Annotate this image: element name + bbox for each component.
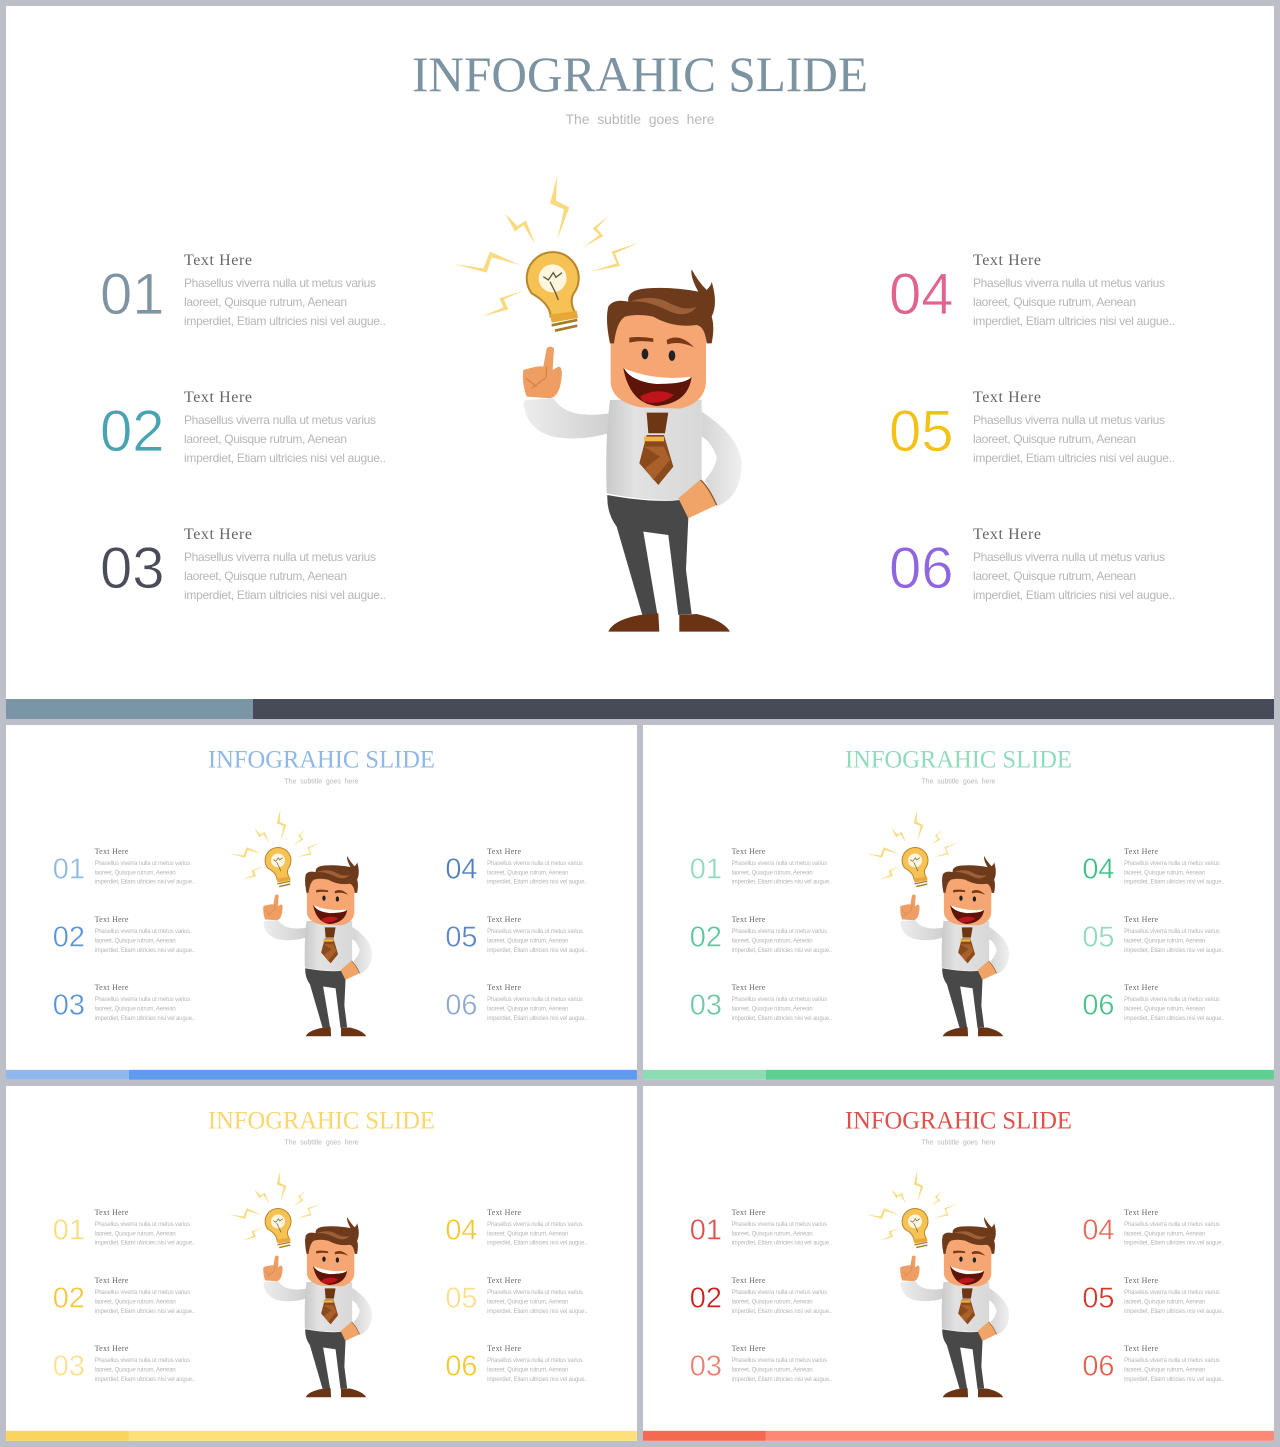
item 02: laoreet, Quisque rutrum, Aenean	[184, 432, 347, 446]
subtitle: The subtitle goes here	[566, 111, 715, 127]
item 03	[690, 1344, 832, 1383]
item 05: Text Here	[487, 1276, 521, 1285]
item 05: 05	[445, 1282, 477, 1314]
item 05	[445, 915, 588, 954]
item 05: imperdiet, Etiam ultricies nisi vel augue..	[1124, 948, 1225, 954]
item 02	[53, 1276, 195, 1315]
item 01: Text Here	[732, 1208, 766, 1217]
item 05: Phasellus viverra nulla ut metus varius	[487, 929, 583, 935]
item 06: Phasellus viverra nulla ut metus varius	[487, 997, 583, 1003]
item 03: imperdiet, Etiam ultricies nisi vel augue..	[732, 1377, 832, 1383]
item 01	[690, 1208, 832, 1247]
item 02: Phasellus viverra nulla ut metus varius	[95, 929, 190, 935]
item 06: Phasellus viverra nulla ut metus varius	[1124, 1358, 1220, 1364]
item 04: 04	[889, 262, 954, 327]
bottom colour bar	[643, 1070, 1274, 1080]
illustration: businessman with light bulb	[229, 1171, 372, 1397]
item 01: Phasellus viverra nulla ut metus varius	[732, 861, 827, 867]
title: INFOGRAHIC SLIDE	[845, 746, 1072, 773]
title: INFOGRAHIC SLIDE	[208, 1107, 435, 1134]
item 04: 04	[1082, 1214, 1114, 1246]
item 01: laoreet, Quisque rutrum, Aenean	[732, 1231, 813, 1237]
item 02: imperdiet, Etiam ultricies nisi vel augue..	[732, 1309, 832, 1315]
item 02	[100, 389, 386, 465]
item 06: 06	[445, 990, 477, 1022]
item 06	[445, 983, 588, 1022]
subtitle: The subtitle goes here	[284, 1140, 359, 1147]
slide: yellow	[6, 1086, 637, 1441]
item 01: Phasellus viverra nulla ut metus varius	[95, 1222, 190, 1228]
item 06: laoreet, Quisque rutrum, Aenean	[973, 569, 1136, 583]
item 03: Phasellus viverra nulla ut metus varius	[732, 997, 827, 1003]
item 05: imperdiet, Etiam ultricies nisi vel augue..	[973, 451, 1175, 465]
subtitle: The subtitle goes here	[921, 779, 996, 786]
item 06: Text Here	[973, 526, 1041, 543]
item 02: 02	[53, 1282, 85, 1314]
item 01	[690, 847, 832, 886]
item 05: Phasellus viverra nulla ut metus varius	[973, 413, 1165, 427]
item 05: imperdiet, Etiam ultricies nisi vel augue..	[487, 1309, 588, 1315]
item 06: imperdiet, Etiam ultricies nisi vel augue..	[973, 588, 1175, 602]
slide: blue	[6, 725, 637, 1080]
item 05: 05	[1082, 1282, 1114, 1314]
item 02: Phasellus viverra nulla ut metus varius	[732, 929, 827, 935]
item 06: Phasellus viverra nulla ut metus varius	[1124, 997, 1220, 1003]
item 03: 03	[690, 990, 722, 1022]
item 02: Phasellus viverra nulla ut metus varius	[732, 1290, 827, 1296]
item 03: 03	[100, 536, 165, 601]
bottom colour bar	[6, 699, 1274, 719]
slide: red	[643, 1086, 1274, 1441]
item 03	[53, 983, 195, 1022]
item 03: Text Here	[184, 526, 252, 543]
item 05: laoreet, Quisque rutrum, Aenean	[973, 432, 1136, 446]
item 03: laoreet, Quisque rutrum, Aenean	[732, 1007, 813, 1013]
item 06: Text Here	[1124, 1344, 1158, 1353]
item 05: Text Here	[1124, 915, 1158, 924]
item 05: 05	[1082, 921, 1114, 953]
item 04: Text Here	[1124, 847, 1158, 856]
item 03: Phasellus viverra nulla ut metus varius	[95, 997, 190, 1003]
subtitle: The subtitle goes here	[284, 779, 359, 786]
item 04: Phasellus viverra nulla ut metus varius	[1124, 1222, 1220, 1228]
item 01: Text Here	[95, 847, 129, 856]
item 01: imperdiet, Etiam ultricies nisi vel augue..	[732, 880, 832, 886]
item 06: laoreet, Quisque rutrum, Aenean	[1124, 1368, 1205, 1374]
item 05	[1082, 1276, 1225, 1315]
item 04: imperdiet, Etiam ultricies nisi vel augue..	[487, 880, 588, 886]
item 03: 03	[690, 1351, 722, 1383]
item 06: laoreet, Quisque rutrum, Aenean	[487, 1007, 568, 1013]
item 04: imperdiet, Etiam ultricies nisi vel augue..	[487, 1241, 588, 1247]
item 02	[53, 915, 195, 954]
item 04: imperdiet, Etiam ultricies nisi vel augue..	[1124, 880, 1225, 886]
item 02: imperdiet, Etiam ultricies nisi vel augue..	[732, 948, 832, 954]
item 01: Text Here	[95, 1208, 129, 1217]
item 05: 05	[889, 399, 954, 464]
item 06: imperdiet, Etiam ultricies nisi vel augue..	[1124, 1016, 1225, 1022]
item 01: imperdiet, Etiam ultricies nisi vel augue..	[95, 1241, 195, 1247]
item 06: Text Here	[1124, 983, 1158, 992]
item 06: imperdiet, Etiam ultricies nisi vel augue..	[487, 1016, 588, 1022]
item 03: imperdiet, Etiam ultricies nisi vel augue..	[184, 588, 386, 602]
item 06	[445, 1344, 588, 1383]
item 02: laoreet, Quisque rutrum, Aenean	[732, 1299, 813, 1305]
item 03: laoreet, Quisque rutrum, Aenean	[95, 1368, 176, 1374]
bottom colour bar	[6, 1431, 637, 1441]
item 01: 01	[100, 262, 165, 327]
item 02: Text Here	[95, 915, 129, 924]
item 06	[889, 526, 1175, 602]
item 03: laoreet, Quisque rutrum, Aenean	[184, 569, 347, 583]
item 04: Phasellus viverra nulla ut metus varius	[973, 276, 1165, 290]
item 02: 02	[690, 1282, 722, 1314]
item 03: Text Here	[732, 1344, 766, 1353]
item 06: Text Here	[487, 983, 521, 992]
item 01: Phasellus viverra nulla ut metus varius	[184, 276, 376, 290]
item 01: 01	[53, 853, 85, 885]
item 03: 03	[53, 990, 85, 1022]
item 02: Phasellus viverra nulla ut metus varius	[95, 1290, 190, 1296]
item 05: Phasellus viverra nulla ut metus varius	[487, 1290, 583, 1296]
item 03: laoreet, Quisque rutrum, Aenean	[95, 1007, 176, 1013]
illustration: businessman with light bulb	[454, 176, 742, 632]
item 02: 02	[100, 399, 165, 464]
item 03: 03	[53, 1351, 85, 1383]
item 05: Text Here	[487, 915, 521, 924]
item 01: imperdiet, Etiam ultricies nisi vel augue..	[95, 880, 195, 886]
item 06	[1082, 1344, 1225, 1383]
item 06: imperdiet, Etiam ultricies nisi vel augue..	[1124, 1377, 1225, 1383]
item 06: imperdiet, Etiam ultricies nisi vel augue..	[487, 1377, 588, 1383]
item 03	[53, 1344, 195, 1383]
item 01: 01	[53, 1214, 85, 1246]
item 01: Phasellus viverra nulla ut metus varius	[732, 1222, 827, 1228]
item 02: laoreet, Quisque rutrum, Aenean	[732, 938, 813, 944]
item 01: Phasellus viverra nulla ut metus varius	[95, 861, 190, 867]
bottom colour bar	[6, 1070, 637, 1080]
item 04: 04	[1082, 853, 1114, 885]
item 05	[445, 1276, 588, 1315]
item 02: imperdiet, Etiam ultricies nisi vel augue..	[184, 451, 386, 465]
title: INFOGRAHIC SLIDE	[412, 46, 868, 102]
item 02: laoreet, Quisque rutrum, Aenean	[95, 938, 176, 944]
item 01: 01	[690, 1214, 722, 1246]
item 03: imperdiet, Etiam ultricies nisi vel augue..	[732, 1016, 832, 1022]
item 02	[690, 915, 832, 954]
illustration: businessman with light bulb	[866, 810, 1009, 1036]
item 05: laoreet, Quisque rutrum, Aenean	[487, 938, 568, 944]
item 03: imperdiet, Etiam ultricies nisi vel augue..	[95, 1377, 195, 1383]
item 02: imperdiet, Etiam ultricies nisi vel augue..	[95, 948, 195, 954]
item 06: 06	[1082, 1351, 1114, 1383]
item 02: Text Here	[95, 1276, 129, 1285]
item 03: Phasellus viverra nulla ut metus varius	[184, 550, 376, 564]
item 05: Text Here	[973, 389, 1041, 406]
slide: main grey	[6, 6, 1274, 719]
item 04: Phasellus viverra nulla ut metus varius	[1124, 861, 1220, 867]
item 03: Text Here	[95, 1344, 129, 1353]
item 02: Text Here	[732, 915, 766, 924]
item 02: Text Here	[732, 1276, 766, 1285]
item 01: Text Here	[184, 252, 252, 269]
item 04: Phasellus viverra nulla ut metus varius	[487, 861, 583, 867]
item 02: laoreet, Quisque rutrum, Aenean	[95, 1299, 176, 1305]
item 04: laoreet, Quisque rutrum, Aenean	[1124, 870, 1205, 876]
item 03: laoreet, Quisque rutrum, Aenean	[732, 1368, 813, 1374]
item 01: laoreet, Quisque rutrum, Aenean	[95, 1231, 176, 1237]
item 03: Phasellus viverra nulla ut metus varius	[95, 1358, 190, 1364]
item 06: 06	[1082, 990, 1114, 1022]
item 04: Text Here	[1124, 1208, 1158, 1217]
item 06: laoreet, Quisque rutrum, Aenean	[1124, 1007, 1205, 1013]
item 05: imperdiet, Etiam ultricies nisi vel augue..	[487, 948, 588, 954]
item 05: laoreet, Quisque rutrum, Aenean	[487, 1299, 568, 1305]
title: INFOGRAHIC SLIDE	[845, 1107, 1072, 1134]
item 04: Text Here	[487, 847, 521, 856]
item 01	[53, 1208, 195, 1247]
item 05: laoreet, Quisque rutrum, Aenean	[1124, 938, 1205, 944]
item 06: 06	[445, 1351, 477, 1383]
item 04: Phasellus viverra nulla ut metus varius	[487, 1222, 583, 1228]
item 05	[889, 389, 1175, 465]
item 06: laoreet, Quisque rutrum, Aenean	[487, 1368, 568, 1374]
subtitle: The subtitle goes here	[921, 1140, 996, 1147]
item 06: Phasellus viverra nulla ut metus varius	[487, 1358, 583, 1364]
item 02: Text Here	[184, 389, 252, 406]
title: INFOGRAHIC SLIDE	[208, 746, 435, 773]
item 01	[100, 252, 386, 328]
item 01	[53, 847, 195, 886]
item 06: 06	[889, 536, 954, 601]
item 05: laoreet, Quisque rutrum, Aenean	[1124, 1299, 1205, 1305]
illustration: businessman with light bulb	[229, 810, 372, 1036]
item 04: laoreet, Quisque rutrum, Aenean	[973, 295, 1136, 309]
item 03: Text Here	[732, 983, 766, 992]
item 04	[445, 1208, 588, 1247]
item 04: imperdiet, Etiam ultricies nisi vel augue..	[973, 314, 1175, 328]
item 04: 04	[445, 853, 477, 885]
item 01: laoreet, Quisque rutrum, Aenean	[184, 295, 347, 309]
item 04: laoreet, Quisque rutrum, Aenean	[487, 870, 568, 876]
item 01: 01	[690, 853, 722, 885]
item 03: Phasellus viverra nulla ut metus varius	[732, 1358, 827, 1364]
item 04: 04	[445, 1214, 477, 1246]
item 05: imperdiet, Etiam ultricies nisi vel augue..	[1124, 1309, 1225, 1315]
item 02: imperdiet, Etiam ultricies nisi vel augue..	[95, 1309, 195, 1315]
slide: green	[643, 725, 1274, 1080]
item 05: 05	[445, 921, 477, 953]
item 04: laoreet, Quisque rutrum, Aenean	[487, 1231, 568, 1237]
item 04: Text Here	[487, 1208, 521, 1217]
item 05: Text Here	[1124, 1276, 1158, 1285]
item 05	[1082, 915, 1225, 954]
item 03	[100, 526, 386, 602]
item 03: imperdiet, Etiam ultricies nisi vel augue..	[95, 1016, 195, 1022]
item 05: Phasellus viverra nulla ut metus varius	[1124, 1290, 1220, 1296]
item 06: Phasellus viverra nulla ut metus varius	[973, 550, 1165, 564]
item 06: Text Here	[487, 1344, 521, 1353]
item 04: laoreet, Quisque rutrum, Aenean	[1124, 1231, 1205, 1237]
item 02: 02	[690, 921, 722, 953]
item 04	[1082, 1208, 1225, 1247]
item 01: Text Here	[732, 847, 766, 856]
item 01: laoreet, Quisque rutrum, Aenean	[95, 870, 176, 876]
item 04	[445, 847, 588, 886]
item 01: imperdiet, Etiam ultricies nisi vel augue..	[732, 1241, 832, 1247]
item 03: Text Here	[95, 983, 129, 992]
item 01: laoreet, Quisque rutrum, Aenean	[732, 870, 813, 876]
item 04: imperdiet, Etiam ultricies nisi vel augue..	[1124, 1241, 1225, 1247]
item 05: Phasellus viverra nulla ut metus varius	[1124, 929, 1220, 935]
illustration: businessman with light bulb	[866, 1171, 1009, 1397]
bottom colour bar	[643, 1431, 1274, 1441]
item 02: Phasellus viverra nulla ut metus varius	[184, 413, 376, 427]
item 02	[690, 1276, 832, 1315]
item 04	[1082, 847, 1225, 886]
item 03	[690, 983, 832, 1022]
item 02: 02	[53, 921, 85, 953]
item 01: imperdiet, Etiam ultricies nisi vel augue..	[184, 314, 386, 328]
item 06	[1082, 983, 1225, 1022]
item 04: Text Here	[973, 252, 1041, 269]
item 04	[889, 252, 1175, 328]
